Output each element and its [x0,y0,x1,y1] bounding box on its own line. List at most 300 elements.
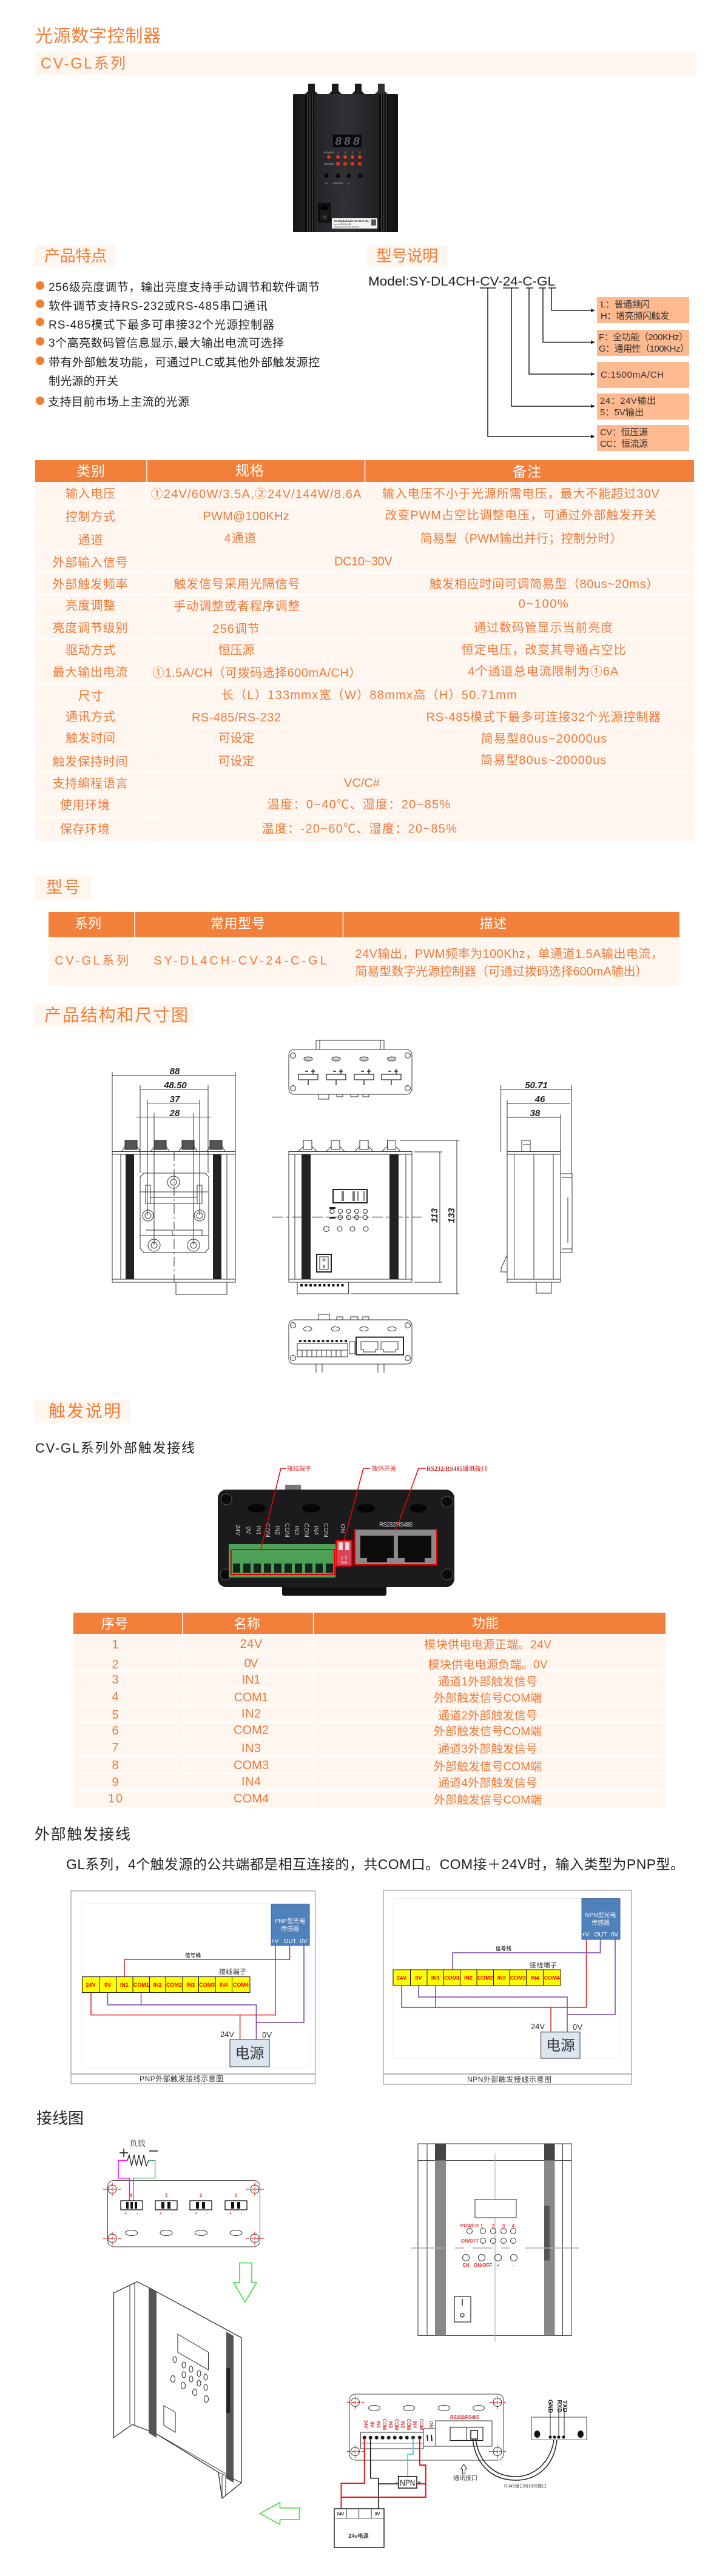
row: control mode [66,508,656,524]
row: trigger hold time [52,753,606,769]
NPN wire labels [496,1945,582,2032]
row: communication: RS-485/RS-232 [192,711,281,724]
drawing: back view: 37 [170,1094,180,1105]
callout lines [261,1468,426,1549]
table header: 规格 [235,463,264,478]
row 10 [108,1792,542,1807]
terminal labels: IN4 [412,2421,417,2429]
row 2: 模块供电电源负端。0V [428,1658,548,1671]
PNP terminal strip [83,1977,250,1993]
panel labels: - [360,182,361,185]
connector numbers [124,2193,243,2216]
row: programming language: VC/C# [344,777,380,790]
comms port: RS232/RS485 [450,2415,480,2420]
connector numbers: + [160,2210,163,2216]
row: control mode: 改变PWM占空比调整电压，可通过外部触发开关 [385,508,656,522]
DB9 connector: RXD [556,2400,562,2413]
panel indicators [462,2229,517,2261]
panel labels: POWER [323,151,334,154]
row: external input: DC10~30V [334,555,393,569]
drawing: top end view [289,1040,412,1099]
product label [332,218,377,229]
table header: 备注 [513,464,541,480]
mounting holes [108,2185,259,2243]
model table header: 常用型号 [211,916,265,931]
model table row: CV-GL系列 [55,954,129,968]
PNP sensor: +V [271,1938,279,1945]
row: trigger frequency: 触发相应时间可调简易型（80us~20ms） [430,577,658,591]
description: GL系列，4个触发源的公共端都是相互连接的，共COM口。COM接＋24V时，输入类型为PNP型。 [66,1856,684,1872]
row: control mode: 控制方式 [66,510,115,524]
PNP terminal strip: 0V [104,1982,111,1988]
row: communication: 通讯方式 [66,710,115,724]
drawing: front view: 133 [447,1208,457,1223]
PNP power box [230,2039,269,2067]
terminal silk labels: IN4 [312,1525,319,1535]
PNP caption: PNP外部触发接线示意图 [140,2074,223,2083]
row 9: 通道4外部触发信号 [438,1776,538,1790]
drawing: back view: 28 [169,1108,180,1119]
product label: Output:DC24V/1.5A/CH [334,226,359,228]
row: drive mode: 恒压源 [218,643,254,657]
drawing: side view [501,1080,572,1293]
DB9 connector: TXD [561,2400,568,2412]
row: trigger hold time: 可设定 [218,754,254,768]
row 10: COM4 [234,1792,269,1805]
product label: Input:DC24V/6A [334,222,351,226]
panel labels: ON/OFF [324,162,335,166]
mounting holes [351,2398,502,2456]
panel labels [460,2223,515,2268]
connector numbers: - [171,2210,173,2216]
panel switch [454,2297,471,2322]
row 1: 模块供电电源正端。24V [424,1638,551,1651]
heading: model explanation [367,245,448,267]
row: channels [78,531,622,547]
model table [49,912,679,986]
row: operating environment: 使用环境 [60,798,110,812]
NPN terminal strip: 0V [415,1975,422,1981]
knobs [125,1140,222,1149]
row 8: 8 [112,1759,119,1772]
table header: 类别 [76,463,105,479]
load symbol [120,2139,158,2166]
row 2: 0V [244,1657,258,1670]
drawing: side view: 46 [534,1094,545,1105]
series band [35,52,696,75]
DIP switch: 1 2 [340,1555,348,1561]
row: trigger time [66,731,607,746]
heading: model explanation: 型号说明 [376,247,438,265]
row 6: COM2 [234,1724,269,1737]
heading: model: 型号 [46,878,80,897]
row: drive mode [66,643,626,657]
row 6: 6 [112,1724,119,1738]
row 6: 外部触发信号COM端 [434,1725,542,1738]
row 7 [112,1741,538,1756]
connector numbers: - [206,2210,208,2216]
power switch [318,203,331,222]
terminal labels: COM [382,2419,387,2430]
green terminal block [229,1544,335,1577]
table header [35,460,694,482]
PNP wire labels: 24V [220,2030,234,2039]
row: trigger hold time: 触发保持时间 [52,755,127,769]
row: operating environment: 温度：0~40℃、湿度：20~85% [268,798,451,812]
communication and trigger wiring [334,2394,587,2548]
model table row: 24V输出，PWM频率为100Khz，单通道1.5A输出电流， [355,947,663,961]
row: programming language: 支持编程语言 [52,777,127,791]
comms port [436,2415,492,2446]
PNP terminal strip: 24V [86,1982,96,1988]
terminal header: 名称 [234,1616,260,1631]
NPN sensor box [395,2477,421,2488]
NPN terminal strip: COM2 [477,1975,493,1981]
series band: CV-GL系列 [41,55,126,72]
row: storage environment: 温度：-20~60℃、湿度：20~85% [262,821,457,835]
terminal silk labels: COM [303,1523,309,1537]
row: size [78,688,517,703]
row: brightness adjust: 0~100% [519,597,568,611]
row: trigger frequency: 触发信号采用光隔信号 [174,577,300,591]
title: 光源数字控制器 [35,26,161,46]
row: max current: 最大输出电流 [52,666,127,680]
subheading: external trigger wiring: 外部触发接线 [35,1826,130,1843]
NPN power box [541,2032,580,2058]
connector numbers: + [124,2210,127,2216]
feature 2: 软件调节支持RS-232或RS-485串口通讯 [49,299,268,313]
connector numbers: 4 [130,2193,133,2198]
connector numbers: + [229,2210,232,2216]
NPN power box: 电源 [546,2038,575,2054]
terminal labels: IN1 [376,2421,381,2429]
model option boxes: 5：5V输出 [600,407,644,418]
DB9 connector: GND [547,2400,553,2413]
callout labels [287,1465,487,1473]
NPN sensor: 0V [611,1932,618,1938]
panel labels: 2 [345,151,346,154]
DIP switch [336,1541,352,1566]
arrow down [234,2263,257,2302]
row 4: 4 [112,1690,119,1704]
terminal silk labels: COM [264,1523,271,1537]
arrow left [260,2503,300,2524]
row 3: 通道1外部触发信号 [438,1675,538,1688]
feature 6: 支持目前市场上主流的光源 [48,395,189,409]
panel labels: 4 [512,2223,515,2229]
panel labels: 1 [480,2223,484,2229]
PNP sensor [271,1904,309,1945]
NPN sensor: NPN型光电 [585,1911,616,1919]
PNP terminal strip: IN1 [120,1982,129,1988]
DB9 connector [531,2400,587,2440]
row 5 [112,1707,538,1722]
row: drive mode: 驱动方式 [66,643,115,657]
NPN terminal strip [393,1970,561,1986]
row: brightness adjust: 亮度调整 [66,599,115,612]
terminal silk labels: 0V [244,1527,251,1534]
row: trigger time: 简易型80us~20000us [481,732,607,746]
DIP switch [423,2429,436,2446]
row 2: 2 [112,1658,119,1671]
row: operating environment [60,798,451,812]
connector numbers: 2 [200,2193,203,2198]
PNP terminal strip: COM1 [133,1982,149,1988]
DIP switch: ON [341,1561,347,1565]
row 9: 9 [112,1776,119,1789]
RJ45 ports [355,1530,437,1565]
terminal silk labels: 24V [234,1525,241,1536]
row: brightness adjust: 手动调整或者程序调整 [174,599,300,613]
callout labels: RS232/RS485通讯接口 [426,1465,487,1473]
panel labels: + [497,2263,500,2268]
row: input voltage: ①24V/60W/3.5A,②24V/144W/8.6A [151,487,362,501]
row 7: IN3 [241,1742,261,1755]
terminal block [361,2432,423,2449]
terminal labels: IN2 [388,2421,393,2429]
model option boxes: 24：24V输出 [600,396,656,406]
model option boxes: F：全功能（200KHz） [599,332,688,343]
row 8 [112,1759,542,1773]
LEDs [327,155,362,166]
terminal labels [363,2419,434,2430]
row 3 [112,1673,538,1688]
row: channels: 简易型（PWM输出并行；控制分时） [420,532,622,546]
feature 5: 制光源的开关 [49,375,118,388]
feature 3: RS-485模式下最多可串接32个光源控制器 [49,318,274,332]
terminal silk labels: COM [283,1523,290,1537]
terminal header: 序号 [101,1616,128,1631]
slots [248,1504,426,1513]
model option boxes: C:1500mA/CH [601,370,664,380]
slots [126,2230,242,2236]
terminal row backgrounds [73,1634,666,1807]
NPN terminal strip: COM3 [510,1975,526,1981]
heading: trigger explanation [35,1400,130,1423]
load symbol: 负载 [130,2139,146,2148]
feature 5 [36,356,320,388]
terminal labels: 0V [369,2421,375,2428]
terminal labels: COM [406,2419,411,2430]
panel labels: - [513,2263,515,2268]
RJ45 to DB9 cable [473,2439,557,2480]
model option boxes [597,297,689,451]
terminal labels: COM [419,2419,424,2430]
screws [220,1494,453,1580]
cable label: RJ45接口转DB9接口 [504,2483,547,2489]
knobs [305,84,388,94]
row: control mode: PWM@100KHz [203,510,289,523]
connector numbers: - [136,2210,138,2216]
row: max current: ①1.5A/CH（可拨码选择600mA/CH） [152,666,361,680]
row 6 [112,1724,542,1738]
subheading: external trigger wiring: CV-GL系列外部触发接线 [35,1440,195,1456]
PNP wire labels [185,1952,272,2039]
NPN wiring diagram [383,1890,632,2084]
feature 4: 3个高亮数码管信息显示,最大输出电流可选择 [49,336,284,350]
heading: trigger explanation: 触发说明 [49,1402,121,1420]
product label: SY-DigitalLight CV-24-C-GL [334,219,369,222]
row 10: 外部触发信号COM端 [434,1793,542,1807]
model table header [49,912,679,937]
dimension lines [112,1072,235,1245]
panel labels: 3 [502,2223,505,2229]
NPN sensor: OUT [594,1932,607,1938]
24V power supply: 24V [337,2512,345,2517]
model table row [49,937,679,986]
load wiring plate [103,2139,264,2247]
row: channels: 通道 [78,533,103,547]
connector numbers: 1 [235,2193,238,2198]
NPN sensor: 传感器 [592,1919,610,1927]
PNP terminal strip: COM2 [166,1982,182,1988]
row: size: 长（L）133mmx宽（W）88mmx高（H）50.71mm [221,688,517,702]
terminal table [73,1613,666,1807]
row 5: 5 [112,1708,119,1722]
terminal header [73,1613,666,1634]
row 4: 外部触发信号COM端 [434,1691,542,1705]
feature 5: 带有外部触发功能，可通过PLC或其他外部触发源控 [49,356,320,369]
front panel drawing [411,2144,579,2342]
model table header: 描述 [479,916,507,931]
comm arrow [461,2464,467,2474]
connector numbers: 3 [165,2193,168,2198]
NPN wire labels: 0V [573,2022,582,2032]
connectors [121,2201,247,2210]
drawing: side view: 38 [530,1108,541,1119]
drawing: back view: 88 [170,1066,180,1077]
row 1: 1 [112,1638,119,1651]
NPN sensor box: - [395,2480,397,2486]
NPN wire labels: 信号线 [496,1945,511,1952]
terminal labels: ON [428,2421,434,2428]
row 9 [112,1775,538,1790]
terminal header: 功能 [472,1616,499,1631]
row: brightness adjust [66,597,568,613]
NPN terminal strip: COM1 [444,1975,460,1981]
terminal silk labels: IN1 [255,1525,261,1535]
row: max current [52,664,619,680]
PNP wire labels: 信号线 [185,1952,201,1958]
table row backgrounds [35,483,694,841]
model option boxes: CV：恒压源 [600,427,648,438]
model table header: 系列 [75,916,101,931]
callout labels: 接线端子 [287,1465,311,1473]
load wires [118,2161,130,2206]
NPN terminal strip: IN3 [497,1975,506,1981]
PNP sensor: 0V [300,1938,308,1945]
row 1 [112,1638,551,1651]
row 4: COM1 [234,1691,268,1704]
comm label: 通讯接口 [453,2474,477,2482]
row: input voltage: 输入电压不小于光源所需电压，最大不能超过30V [382,487,660,501]
row: trigger time: 可设定 [218,731,254,745]
row: communication: RS-485模式下最多可连接32个光源控制器 [426,710,661,724]
connector numbers: - [241,2210,243,2216]
model option boxes: H：增亮频闪触发 [601,311,669,321]
heading: structure and dimensions: 产品结构和尺寸图 [44,1006,188,1025]
24V power supply: 0V [375,2512,380,2517]
model option boxes: L：普通频闪 [601,299,650,310]
dimension drawings [112,1040,572,1373]
row: brightness levels [52,621,613,636]
product photo [293,84,398,232]
panel labels [323,151,361,185]
panel labels: 4 [359,151,361,154]
model table row: 简易型数字光源控制器（可通过拨码选择600mA输出） [355,965,648,979]
row: external input [52,555,393,570]
panel labels: CH [325,182,328,185]
row: channels: 4通道 [224,531,256,545]
NPN terminal strip: IN4 [530,1975,539,1981]
specification table [35,460,694,841]
model table row: SY-DL4CH-CV-24-C-GL [153,954,327,968]
NPN sensor box: NPN [400,2478,415,2487]
NPN terminal strip: 24V [397,1975,406,1981]
signal wires [341,2438,426,2509]
panel labels: ON/OFF [332,182,343,185]
row 7: 通道3外部触发信号 [438,1742,538,1756]
PNP power box: 电源 [235,2046,265,2062]
row: input voltage [66,487,660,501]
NPN caption: NPN外部触发接线示意图 [467,2075,551,2084]
row: external input: 外部输入信号 [52,555,127,570]
row: drive mode: 恒定电压，改变其导通占空比 [462,643,626,657]
NPN sensor box: + [417,2480,421,2486]
drawing: bottom end view [289,1314,412,1373]
panel labels: ON/OFF [461,2238,479,2244]
model code: Model:SY-DL4CH-CV-24-C-GL [368,275,555,289]
row: storage environment: 保存环境 [60,823,110,837]
drawing: front view [272,1140,459,1294]
PNP sensor: PNP型光电 [275,1917,305,1925]
model option boxes: CC：恒流源 [600,439,648,449]
terminal silk labels: ON [339,1524,346,1533]
row: trigger frequency [52,577,658,592]
PNP wire labels: 0V [262,2030,272,2039]
row 10: 10 [108,1792,123,1805]
heading: features [35,245,115,267]
row 8: 外部触发信号COM端 [434,1760,542,1773]
panel labels: 3 [352,151,354,154]
model option boxes: G：通用性（100KHz） [599,344,689,354]
row: brightness levels: 通过数码管显示当前亮度 [474,621,613,635]
heading: features: 产品特点 [44,247,107,265]
row: input voltage: 输入电压 [66,487,115,501]
drawing: front view: 113 [430,1208,440,1223]
connector numbers: + [195,2210,198,2216]
PNP terminal strip: IN3 [186,1982,195,1988]
row: brightness levels: 256调节 [212,622,260,636]
panel labels: 1 [337,151,339,154]
terminal silk labels: IN2 [274,1525,280,1535]
terminal labels: IN3 [400,2421,405,2429]
mounting plate [140,1173,209,1253]
PNP terminal strip: COM3 [199,1982,215,1988]
feature list [36,281,320,409]
panel labels: 2 [492,2223,495,2229]
NPN sensor [582,1899,620,1939]
PNP terminal strip: COM4 [233,1982,249,1988]
feature 1: 256级亮度调节，输出亮度支持手动调节和软件调节 [49,281,320,294]
row: trigger time: 触发时间 [66,731,115,745]
panel labels: ON/OFF [474,2263,492,2268]
PNP wiring diagram [71,1891,315,2084]
panel labels: + [348,182,350,185]
display: 888 [335,135,360,149]
row 3: IN1 [242,1673,260,1687]
drawing: back view: 48.50 [163,1080,187,1091]
